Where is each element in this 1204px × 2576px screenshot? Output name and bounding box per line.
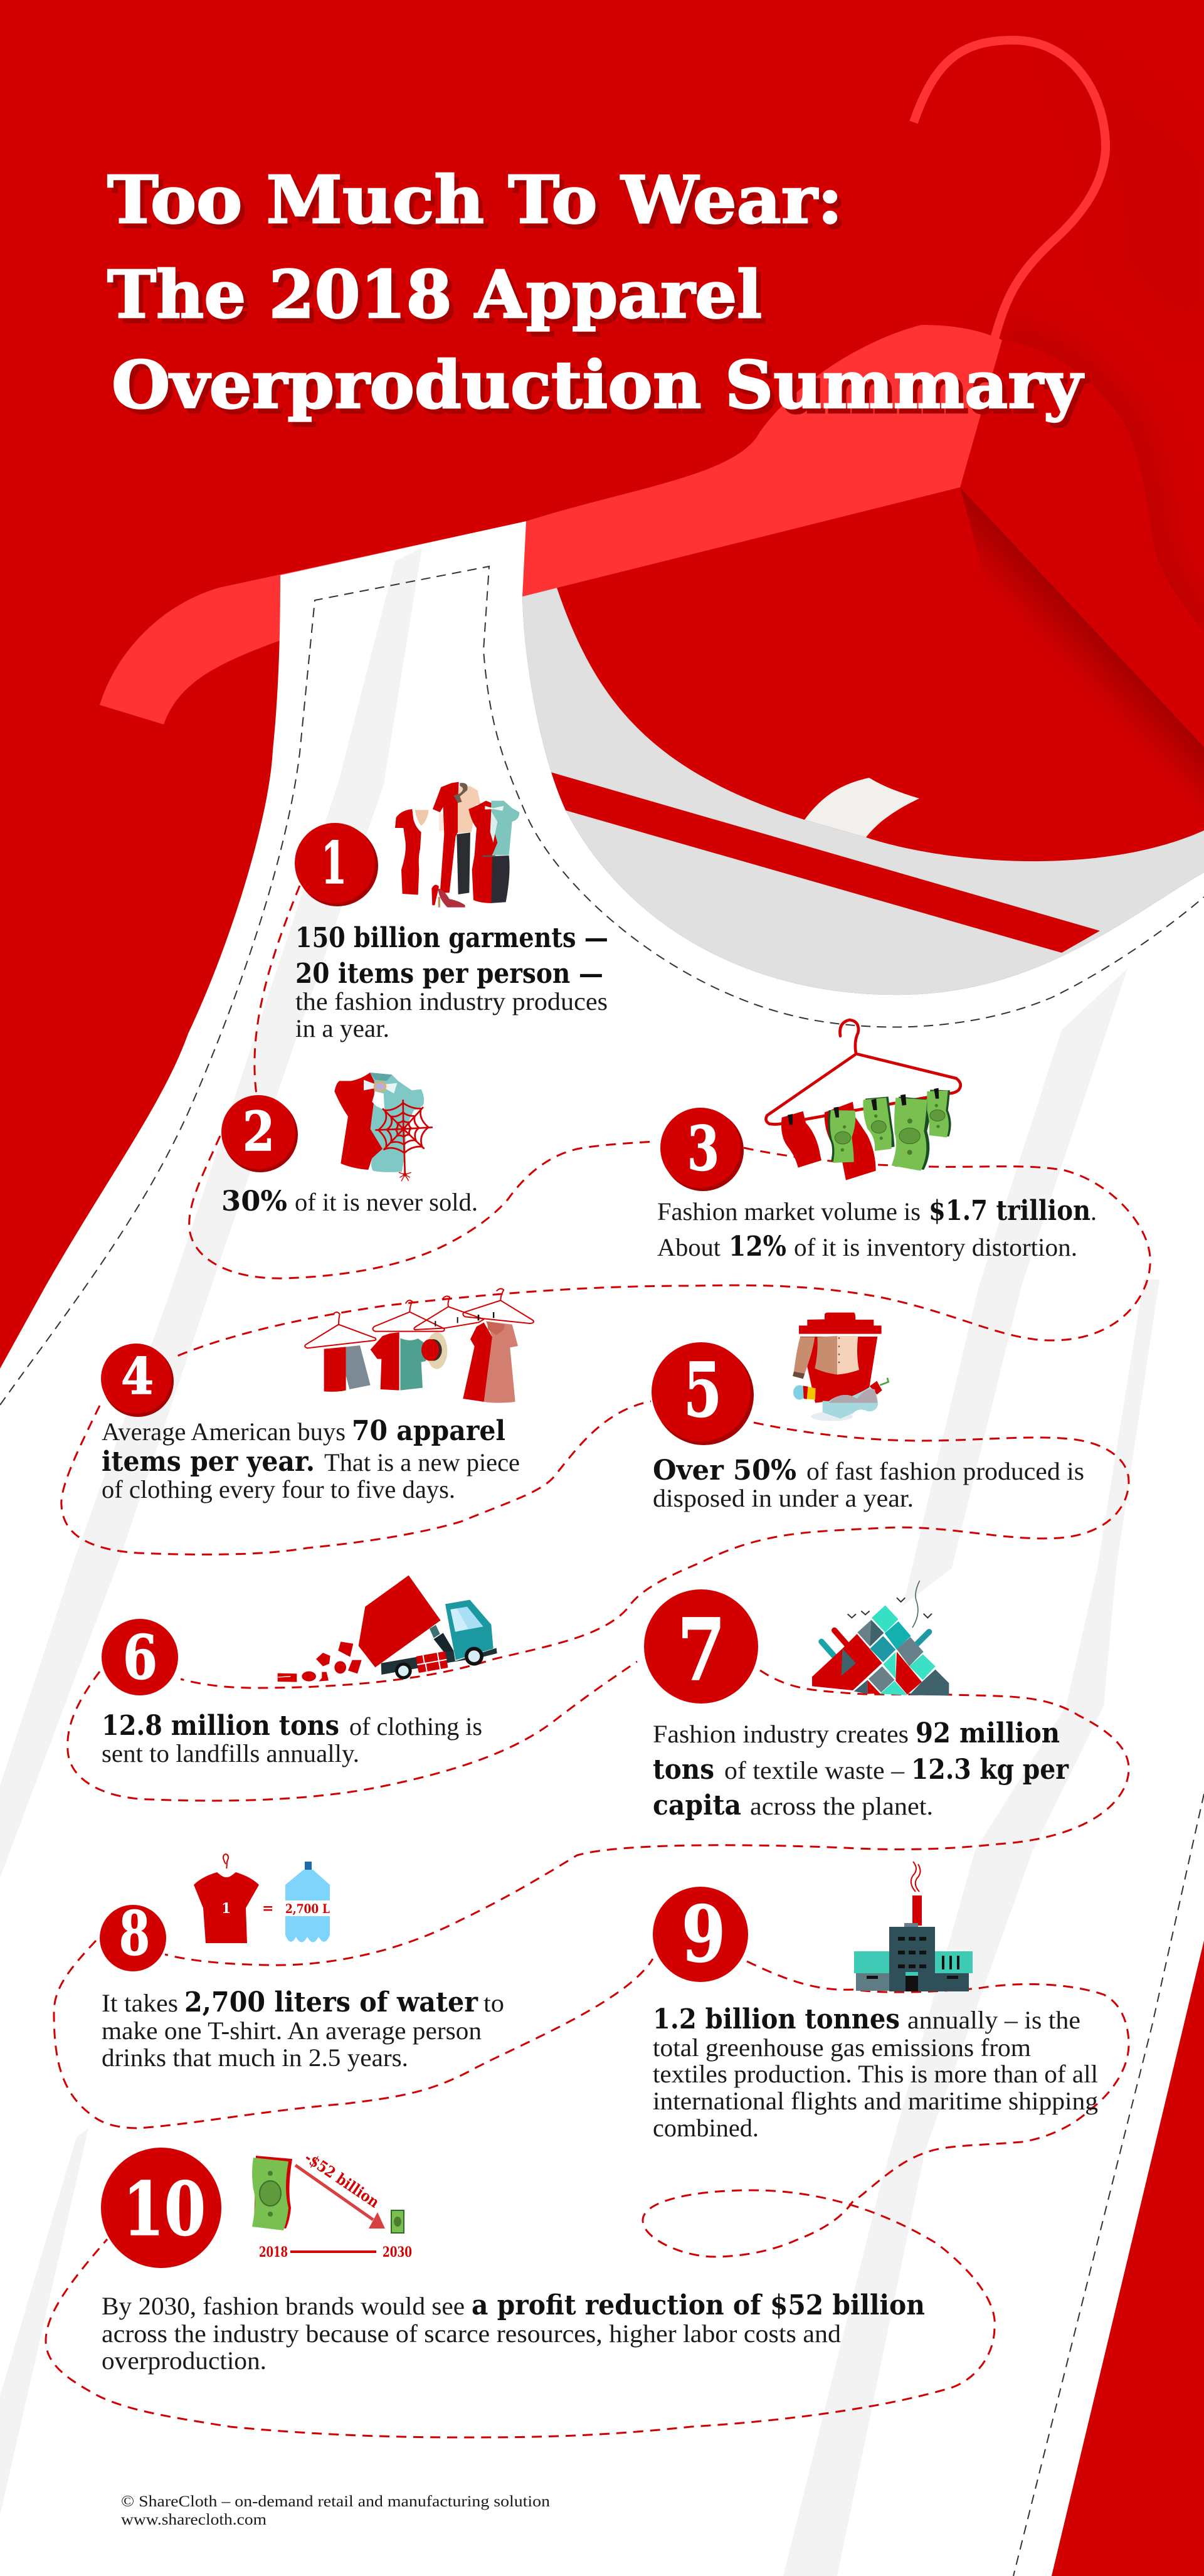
text 5 xyxy=(653,1455,1084,1512)
text 8: to xyxy=(483,1989,504,2017)
text 3: of it is inventory distortion. xyxy=(794,1233,1077,1261)
text 8 xyxy=(102,1986,504,2072)
text 8: It takes xyxy=(102,1989,178,2017)
text 4 xyxy=(102,1415,520,1503)
text 8: drinks that much in 2.5 years. xyxy=(102,2043,408,2072)
text 1 xyxy=(295,922,608,1042)
text 4: of clothing every four to five days. xyxy=(102,1475,455,1503)
footer credit: www.sharecloth.com xyxy=(121,2511,267,2528)
number badge 8: 8 xyxy=(119,1898,150,1969)
title: Too Much To Wear: xyxy=(107,161,843,238)
number badge 4 xyxy=(101,1344,174,1417)
text 7: Fashion industry creates xyxy=(653,1720,909,1748)
item 3: market volume xyxy=(657,1020,1097,1263)
right red garment edge xyxy=(1052,1941,1204,2576)
inner red band xyxy=(546,771,1100,953)
icon: hanger with money and red garments xyxy=(766,1020,961,1180)
text 8: make one T-shirt. An average person xyxy=(102,2017,482,2045)
item 2: 30 percent never sold xyxy=(221,1073,478,1217)
icon: clothes on four hangers xyxy=(305,1289,534,1403)
text 1: in a year. xyxy=(295,1014,389,1042)
text 3 xyxy=(657,1195,1097,1263)
icon: dump truck unloading clothes xyxy=(278,1576,497,1682)
text 7: of textile waste – xyxy=(724,1756,905,1784)
icon: smoking pile of textile waste xyxy=(812,1581,949,1695)
number badge 3 xyxy=(660,1108,744,1191)
text 3: 12% xyxy=(729,1231,786,1263)
icon: shrinking banknote chart 2018 to 2030: 2030 xyxy=(383,2244,412,2261)
text 1: 20 items per person — xyxy=(295,958,603,990)
text 3: About xyxy=(657,1233,721,1261)
text 10: overproduction. xyxy=(102,2346,267,2375)
title: Overproduction Summary xyxy=(112,346,1084,423)
item 6: clothing sent to landfills xyxy=(102,1576,497,1768)
number badge 7 xyxy=(644,1589,758,1704)
icon: factory with chimney xyxy=(854,1862,973,1991)
item 4: American apparel purchases xyxy=(101,1289,534,1503)
text 9: annually – is the xyxy=(907,2006,1080,2034)
icon: row of half-red garments and shoe xyxy=(395,782,519,908)
text 7: 12.3 kg per xyxy=(911,1754,1069,1786)
icon: shrinking banknote chart 2018 to 2030: 2018 xyxy=(259,2244,288,2261)
text 2 xyxy=(221,1185,478,1217)
icon: T-shirt equals bottle of water xyxy=(194,1854,330,1943)
text 5: of fast fashion produced is xyxy=(806,1457,1084,1485)
item 9: greenhouse gas emissions xyxy=(653,1862,1098,2142)
text 7: tons xyxy=(653,1754,714,1786)
white shirt xyxy=(0,521,1204,2576)
number badge 10: 10 xyxy=(123,2166,206,2252)
text 5: Over 50% xyxy=(653,1455,796,1487)
text 6 xyxy=(102,1710,482,1768)
number badge 3: 3 xyxy=(687,1113,719,1184)
text 4: That is a new piece xyxy=(324,1448,520,1476)
text 8: 2,700 liters of water xyxy=(184,1986,478,2018)
text 2: 30% xyxy=(221,1185,287,1217)
title xyxy=(107,161,1084,423)
text 9: total greenhouse gas emissions from xyxy=(653,2033,1031,2062)
number badge 6 xyxy=(102,1619,178,1695)
item 8: water per T-shirt xyxy=(100,1854,504,2072)
text 5: disposed in under a year. xyxy=(653,1484,914,1512)
hanger body xyxy=(100,325,1002,724)
text 7: capita xyxy=(653,1789,741,1821)
number badge 8 xyxy=(100,1898,166,1971)
icon: T-shirt equals bottle of water: = xyxy=(262,1900,273,1917)
text 7: across the planet. xyxy=(750,1792,933,1820)
number badge 7: 7 xyxy=(677,1600,726,1700)
number badge 4: 4 xyxy=(121,1347,154,1406)
footer credit xyxy=(121,2493,551,2528)
text 10: a profit reduction of $52 billion xyxy=(472,2289,925,2321)
icon: T-shirt equals bottle of water: 1 xyxy=(221,1900,231,1917)
number badge 2: 2 xyxy=(243,1100,275,1163)
text 4: items per year. xyxy=(102,1446,315,1478)
inner label xyxy=(805,778,919,837)
number badge 1: 1 xyxy=(321,829,347,897)
text 9: textiles production. This is more than of all xyxy=(653,2060,1098,2088)
text 9: combined. xyxy=(653,2114,759,2142)
number badge 5 xyxy=(652,1342,754,1445)
icon: T-shirt equals bottle of water: 2,700 L xyxy=(285,1901,330,1916)
hanger hook xyxy=(914,40,1106,339)
number badge 10 xyxy=(101,2148,221,2268)
icon: trash bin with clothes and bottles xyxy=(793,1313,889,1421)
text 6: sent to landfills annually. xyxy=(102,1739,359,1768)
text 10: By 2030, fashion brands would see xyxy=(102,2292,465,2320)
grey shirt interior xyxy=(522,588,1204,995)
number badge 2 xyxy=(221,1095,298,1172)
number badge 9 xyxy=(653,1887,748,1982)
number badge 5: 5 xyxy=(684,1347,722,1434)
text 1: the fashion industry produces xyxy=(295,987,608,1015)
number badge 1 xyxy=(295,823,378,906)
dashed red route connecting the items xyxy=(46,886,1150,2437)
icon: shrinking banknote chart 2018 to 2030: -$52 billion xyxy=(302,2148,383,2212)
text 1: 150 billion garments — xyxy=(295,922,608,954)
text 10: across the industry because of scarce resources, higher labor costs and xyxy=(102,2319,841,2348)
icon: shirt with spider web xyxy=(334,1073,433,1181)
item 10: profit reduction xyxy=(101,2148,925,2375)
text 4: 70 apparel xyxy=(352,1415,505,1447)
title: The 2018 Apparel xyxy=(107,256,762,333)
text 7 xyxy=(653,1717,1069,1821)
text 7: 92 million xyxy=(916,1717,1060,1749)
text 3: $1.7 trillion xyxy=(929,1195,1090,1227)
text 6: of clothing is xyxy=(349,1712,482,1741)
item 1: 150 billion garments xyxy=(295,782,608,1042)
text 10 xyxy=(102,2289,925,2375)
text 2: of it is never sold. xyxy=(295,1188,478,1216)
text 9: 1.2 billion tonnes xyxy=(653,2003,900,2035)
item 5: fast fashion disposed xyxy=(652,1313,1084,1512)
text 3: Fashion market volume is xyxy=(657,1197,921,1226)
text 9: international flights and maritime shipping xyxy=(653,2087,1098,2115)
icon: shrinking banknote chart 2018 to 2030 xyxy=(252,2148,412,2261)
text 4: Average American buys xyxy=(102,1418,346,1446)
number badge 6: 6 xyxy=(123,1622,157,1693)
text 6: 12.8 million tons xyxy=(102,1710,339,1742)
footer credit: © ShareCloth – on-demand retail and manufacturing solution xyxy=(121,2493,551,2510)
text 9 xyxy=(653,2003,1098,2142)
number badge 9: 9 xyxy=(682,1890,726,1980)
item 7: textile waste xyxy=(644,1581,1069,1821)
text 3: . xyxy=(1090,1197,1097,1226)
